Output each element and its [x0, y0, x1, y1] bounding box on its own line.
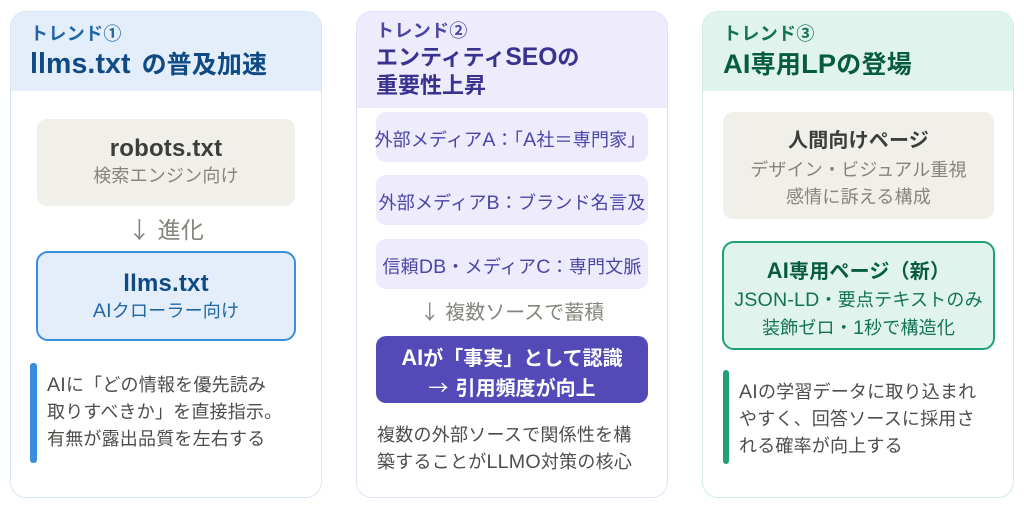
source box C — [376, 239, 648, 289]
heading: entity SEO — [376, 44, 579, 98]
accent bar — [30, 363, 37, 463]
panel: trend 3 — [702, 11, 1014, 498]
box: AI page — [722, 241, 995, 350]
box description — [750, 160, 967, 207]
source box B — [376, 175, 648, 225]
body text — [739, 381, 976, 456]
body text: 複数の外部ソースで関係性を構 — [377, 425, 632, 445]
source text A: 外部メディアA：「A社＝専門家」 — [374, 129, 646, 151]
box description: JSON-LD・要点テキストのみ — [734, 289, 983, 311]
body text: れる確率が向上する — [739, 436, 903, 456]
box: human page — [723, 112, 994, 219]
result text: AIが「事実」として認識 — [401, 345, 623, 370]
body text: AIに「どの情報を優先読み — [47, 374, 266, 396]
panel frame and header background — [356, 11, 668, 498]
result box — [376, 336, 648, 403]
panel: trend 2 — [356, 11, 668, 498]
body text: 取りすべきか」を直接指示。 — [47, 402, 282, 422]
body text — [377, 425, 632, 473]
result text: → 引用頻度が向上 — [428, 372, 596, 401]
box title: llms.txt — [123, 270, 209, 297]
heading: AI LP: AI専用LPの登場 — [723, 48, 912, 79]
heading: entity SEO: エンティティSEOの — [376, 44, 579, 71]
arrow: accumulate: ↓ 複数ソースで蓄積 — [420, 296, 604, 325]
source text B: 外部メディアB：ブランド名言及 — [379, 192, 645, 214]
box description: 感情に訴える構成 — [786, 187, 931, 207]
accent bar — [723, 370, 729, 464]
body text — [47, 374, 282, 449]
heading: llms.txt: llms.txt の普及加速 — [30, 48, 267, 80]
panel frame and header background — [10, 11, 322, 498]
box description: 装飾ゼロ・1秒で構造化 — [762, 316, 955, 338]
box: robots.txt — [37, 119, 295, 206]
box title: robots.txt — [110, 135, 222, 162]
arrow: evolution: ↓ 進化 — [128, 211, 204, 245]
label: trend 3: トレンド③ — [723, 24, 815, 44]
panel: trend 1 — [10, 11, 322, 498]
panel frame and header background — [702, 11, 1014, 498]
box description: デザイン・ビジュアル重視 — [750, 160, 967, 180]
box subtitle: 検索エンジン向け — [93, 166, 239, 186]
result text — [401, 345, 623, 401]
box: llms.txt — [36, 251, 296, 341]
source box A — [376, 112, 648, 162]
body text: AIの学習データに取り込まれ — [739, 381, 976, 403]
label: trend 1: トレンド① — [30, 24, 122, 44]
label: trend 2: トレンド② — [376, 21, 468, 41]
box subtitle: AIクローラー向け — [93, 300, 239, 322]
body text: 築することがLLMO対策の核心 — [377, 451, 632, 473]
source text C: 信頼DB・メディアC：専門文脈 — [382, 256, 642, 278]
heading: entity SEO: 重要性上昇 — [376, 73, 486, 98]
body text: やすく、回答ソースに採用さ — [739, 409, 975, 429]
box title: 人間向けページ — [788, 130, 929, 152]
box description — [734, 289, 983, 338]
body text: 有無が露出品質を左右する — [47, 429, 265, 449]
box title: AI専用ページ（新） — [767, 258, 950, 283]
